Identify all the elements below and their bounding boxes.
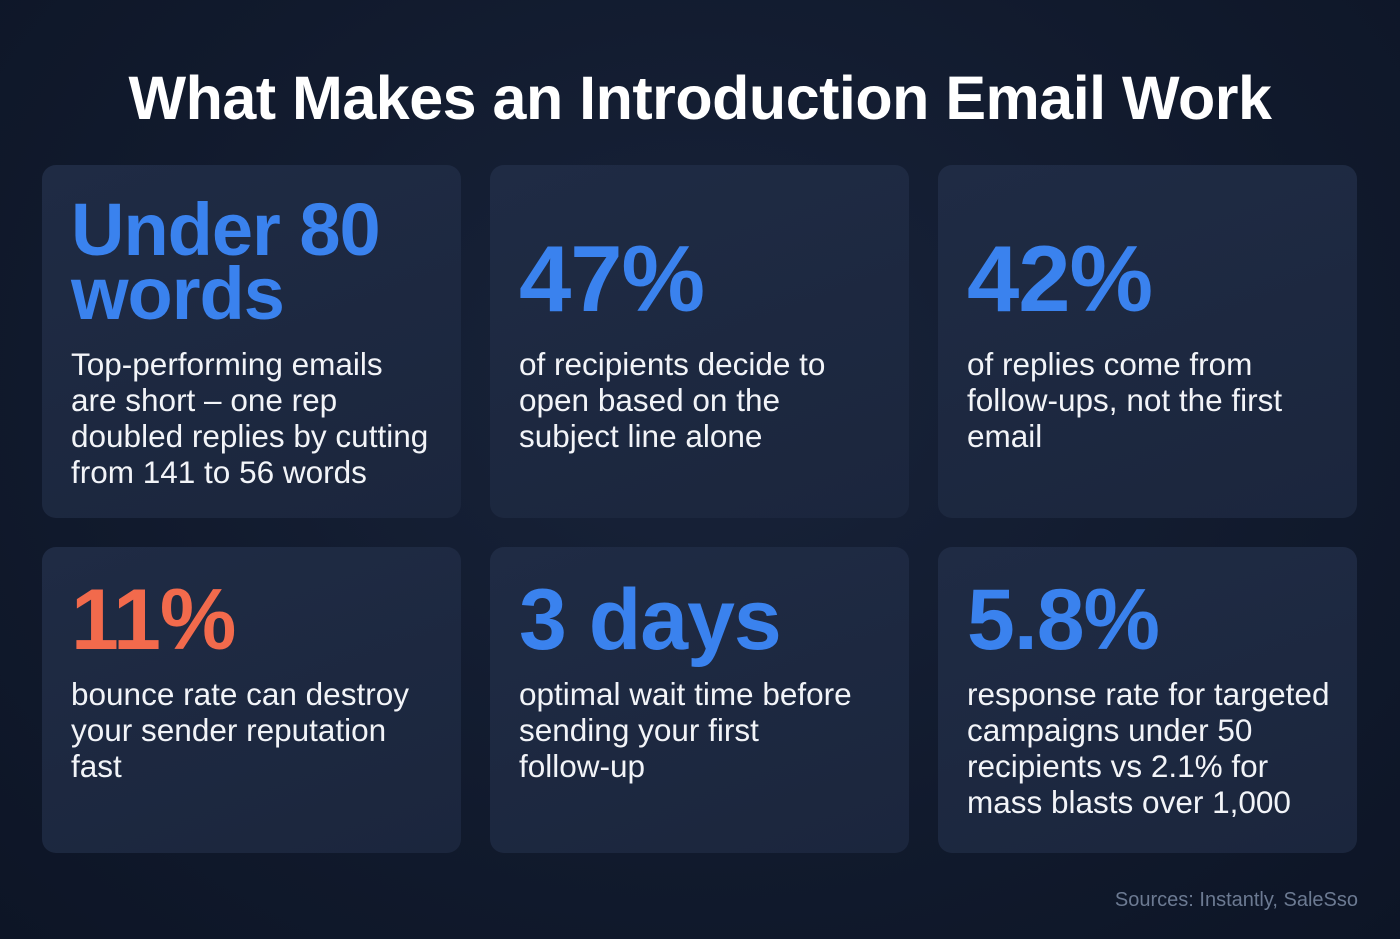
text: wait time: sending your first: [519, 712, 759, 748]
text: bounce rate: your sender reputation: [71, 712, 386, 748]
stat: 11%: 11%: [71, 572, 235, 668]
text: wait time: [519, 676, 852, 784]
text: subject line: of recipients decide to: [519, 346, 825, 382]
stat: under 80 words: words: [71, 252, 284, 335]
text: short emails: from 141 to 56 words: [71, 454, 367, 490]
text: response rate: response rate for targeted: [967, 676, 1329, 712]
text: bounce rate: bounce rate can destroy: [71, 676, 409, 712]
text: subject line: subject line alone: [519, 418, 762, 454]
text: short emails: doubled replies by cutting: [71, 418, 428, 454]
text: follow-ups: email: [967, 418, 1042, 454]
panel: 5.8%: [938, 547, 1357, 853]
text: subject line: [519, 346, 825, 454]
text: wait time: optimal wait time before: [519, 676, 852, 712]
text: short emails: Top-performing emails: [71, 346, 383, 382]
text: bounce rate: [71, 676, 409, 784]
text: subject line: open based on the: [519, 382, 780, 418]
text: response rate: mass blasts over 1,000: [967, 784, 1291, 820]
text: follow-ups: [967, 346, 1282, 454]
stat: 42%: 42%: [967, 226, 1152, 331]
panel: under 80 words: [42, 165, 461, 518]
text: bounce rate: fast: [71, 748, 122, 784]
stat: under 80 words: Under 80: [71, 188, 380, 271]
panel: 47%: [490, 165, 909, 518]
text: short emails: [71, 346, 428, 490]
stat: 47%: 47%: [519, 226, 704, 331]
text: response rate: recipients vs 2.1% for: [967, 748, 1268, 784]
text: follow-ups: follow-ups, not the first: [967, 382, 1282, 418]
panel: 3 days: [490, 547, 909, 853]
text: response rate: [967, 676, 1329, 820]
stat: 5.8%: 5.8%: [967, 572, 1159, 668]
stat: under 80 words: [70, 188, 380, 335]
stat: 3 days: 3 days: [519, 572, 781, 668]
panel: 42%: [938, 165, 1357, 518]
text: follow-ups: of replies come from: [967, 346, 1252, 382]
title: What Makes an Introduction Email Work: [129, 64, 1271, 132]
panel: 11%: [42, 547, 461, 853]
text: short emails: are short – one rep: [71, 382, 337, 418]
text: wait time: follow-up: [519, 748, 645, 784]
sources: Sources: Instantly, SaleSso: [1115, 889, 1358, 911]
text: response rate: campaigns under 50: [967, 712, 1252, 748]
